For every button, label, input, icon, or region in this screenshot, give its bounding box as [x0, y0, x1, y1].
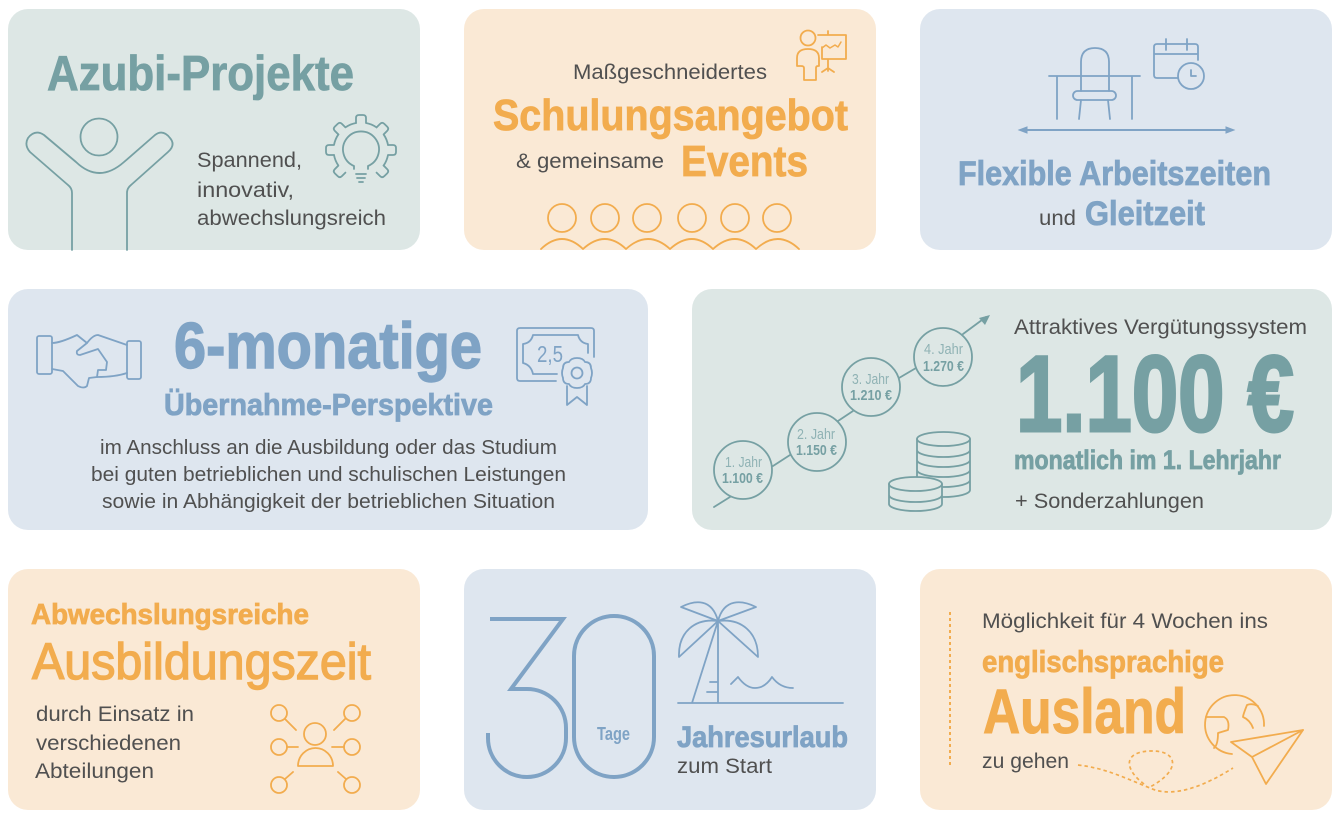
text block: durch Einsatz	[35, 703, 194, 783]
arrow: double-headed	[1019, 127, 1234, 133]
icon: desk and chair	[1049, 48, 1140, 119]
panel: Flexible Arbeitszeiten	[920, 9, 1332, 250]
text block: Übernahme details: bei guten betrieblichen und schulischen Leistungen	[91, 464, 566, 486]
icon: presenter with chart	[797, 30, 846, 80]
text block: Übernahme details: im Anschluss an die Ausbildung oder das Studium	[100, 437, 557, 459]
chart: salary by training year: 1. Jahr	[725, 454, 762, 471]
chart: salary by training year: 1.150 €	[796, 442, 838, 459]
chart: salary by training year: 3. Jahr	[852, 371, 889, 388]
icon: certificate: 2,5	[537, 341, 563, 367]
text: Sonderzahlungen: + Sonderzahlungen	[1015, 490, 1204, 513]
icon: person network	[271, 705, 360, 793]
chart: salary by training year: 2. Jahr	[797, 426, 835, 443]
panel: Azubi-Projekte	[8, 9, 420, 250]
heading: Abwechslungsreiche: Abwechslungsreiche	[31, 599, 309, 631]
text: Attraktives Vergütungssystem: Attraktives Vergütungssystem	[1014, 316, 1307, 339]
heading: Flexible Arbeitszeiten: Flexible Arbeitszeiten	[958, 155, 1271, 193]
text: Möglichkeit: Möglichkeit für 4 Wochen ins	[982, 610, 1268, 633]
text block: Spannend: innovativ,	[197, 179, 294, 202]
heading: monatlich im 1. Lehrjahr: monatlich im 1. Lehrjahr	[1014, 445, 1281, 475]
heading: Events: Events	[681, 137, 808, 186]
chart: salary by training year: 1.270 €	[923, 358, 965, 375]
text block: Spannend: Spannend,	[197, 149, 302, 172]
heading: Ausland: Ausland	[983, 677, 1186, 747]
heading: 6-monatige: 6-monatige	[174, 309, 482, 382]
dotted line: vertical	[949, 612, 951, 768]
dotted path: flight route	[1078, 751, 1233, 792]
icon: paper plane	[1231, 730, 1303, 784]
icon: palm beach	[678, 602, 843, 703]
icon: globe	[1205, 695, 1264, 754]
text block: Spannend: abwechslungsreich	[197, 207, 386, 230]
text block: durch Einsatz: durch Einsatz in	[36, 703, 194, 726]
heading: Übernahme-Perspektive: Übernahme-Perspektive	[164, 387, 493, 422]
icon: calendar with clock	[1154, 39, 1204, 89]
chart: salary by training year: 4. Jahr	[924, 341, 963, 358]
text: Tage: Tage	[597, 724, 630, 744]
text: Maßgeschneidertes: Maßgeschneidertes	[573, 61, 767, 84]
text: gemeinsame: & gemeinsame	[516, 150, 664, 173]
text block: durch Einsatz: verschiedenen	[36, 732, 181, 755]
heading: englischsprachige: englischsprachige	[982, 644, 1224, 679]
heading: Azubi-Projekte: Azubi-Projekte	[47, 47, 354, 101]
panel: Ausbildungszeit	[8, 569, 420, 810]
text block: Spannend	[197, 149, 386, 230]
text: und: und	[1039, 207, 1076, 230]
text block: Übernahme details: sowie in Abhängigkeit der betrieblichen Situation	[102, 491, 555, 513]
illustration: audience	[541, 204, 799, 249]
heading: Gleitzeit: Gleitzeit	[1085, 195, 1205, 233]
text block: durch Einsatz: Abteilungen	[35, 760, 154, 783]
text: zu gehen: zu gehen	[982, 750, 1069, 773]
icon: gear with light bulb	[325, 114, 397, 182]
heading: Ausbildungszeit: Ausbildungszeit	[32, 633, 371, 690]
text block: Übernahme details	[91, 437, 566, 513]
chart: salary by training year	[714, 315, 990, 507]
icon: coin stacks	[889, 432, 970, 511]
panel: Vergütung	[692, 289, 1332, 530]
heading: Schulungsangebot: Schulungsangebot	[493, 91, 848, 140]
panel: Ausland	[920, 569, 1332, 810]
number: 30	[488, 616, 654, 777]
panel: Übernahme-Perspektive	[8, 289, 648, 530]
panel: Jahresurlaub	[464, 569, 876, 810]
chart: salary by training year: 1.100 €	[722, 470, 764, 487]
heading: Jahresurlaub: Jahresurlaub	[677, 721, 848, 754]
icon: handshake	[37, 335, 141, 388]
icon: certificate	[517, 328, 594, 405]
text: zum Start: zum Start	[677, 755, 772, 778]
icon: cheering person	[26, 118, 173, 250]
chart: salary by training year: 1.210 €	[850, 387, 893, 404]
panel: Schulungsangebot	[464, 9, 876, 250]
